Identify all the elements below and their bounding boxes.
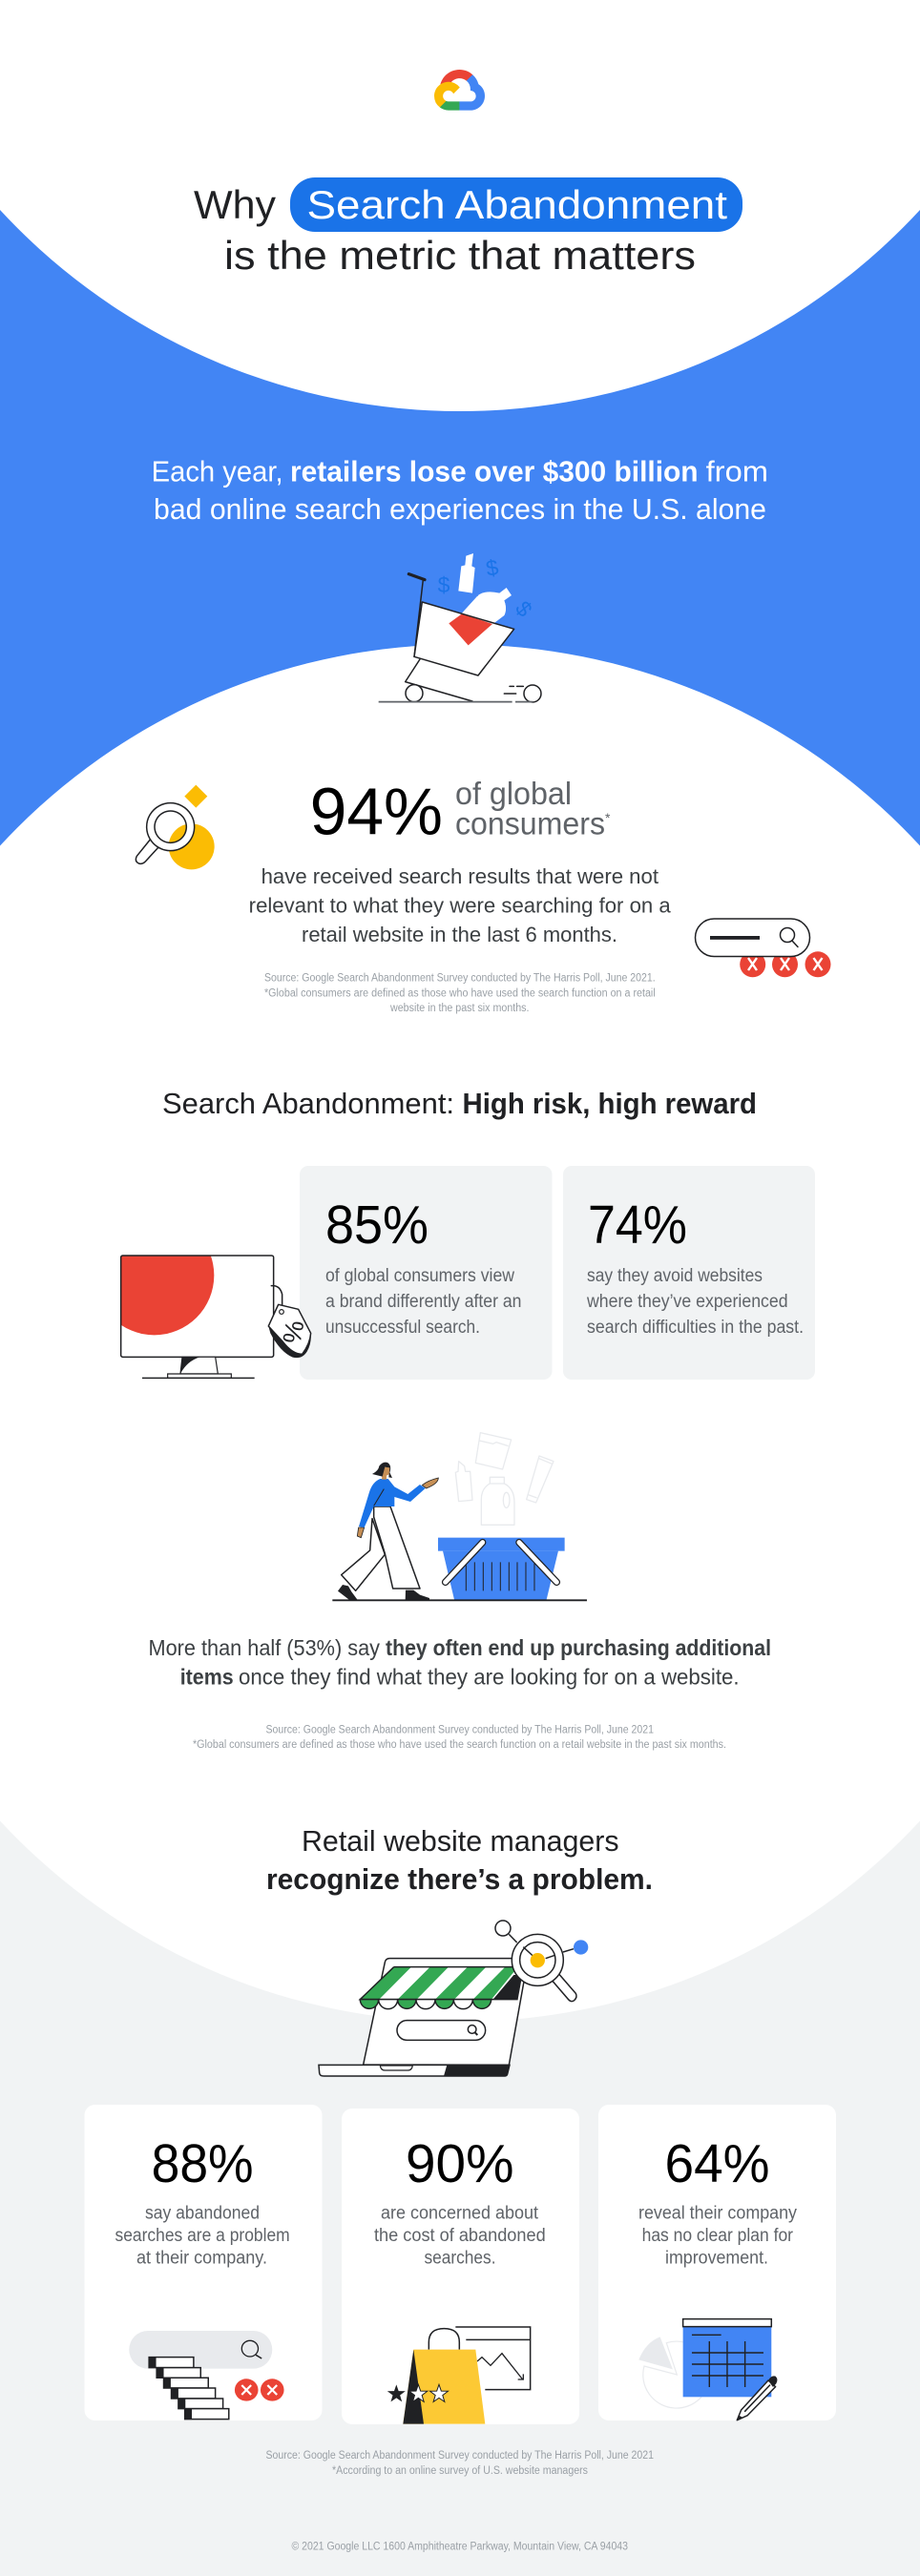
source note: purchases	[193, 1725, 726, 1751]
title	[194, 177, 742, 278]
icon: magnifier with yellow shapes	[136, 785, 215, 869]
text block: 53% purchase more: once they find what they are looking for on a website.	[239, 1665, 740, 1690]
74% number: 74%	[588, 1195, 687, 1256]
64% number: 64%	[664, 2133, 769, 2194]
source note: consumers: *Global consumers are defined as those who have used the search function on a retail	[264, 987, 656, 999]
heading: high risk, high reward: Search Abandonment:	[162, 1087, 454, 1120]
64% description: reveal their company	[638, 2204, 797, 2224]
heading: high risk, high reward	[162, 1087, 757, 1120]
price tag percent sign: %	[277, 1319, 309, 1345]
source note: purchases: *Global consumers are defined as those who have used the search function on a retail website in the past six months.	[193, 1739, 726, 1751]
74% description	[586, 1266, 804, 1338]
cart frame	[406, 580, 472, 701]
source note: consumers	[264, 973, 656, 1014]
text block: 53% purchase more: items	[180, 1665, 234, 1690]
dollar signs: $	[511, 596, 537, 621]
stat: 94% of global consumers: of global	[455, 776, 572, 811]
icon: shopping bag with chart and stars	[387, 2327, 531, 2424]
90% description: searches.	[424, 2249, 496, 2269]
85% number: 85%	[325, 1195, 429, 1256]
source note: consumers: website in the past six months.	[389, 1003, 529, 1014]
cart wheels	[406, 685, 423, 702]
64% description: improvement.	[665, 2249, 768, 2269]
footer copyright: © 2021 Google LLC 1600 Amphitheatre Parkway, Mountain View, CA 94043	[292, 2542, 628, 2553]
icon: shopping cart with tumbling items	[379, 553, 541, 702]
90% description	[374, 2204, 546, 2269]
88% description: say abandoned	[145, 2204, 260, 2224]
stat: 94% of global consumers: consumers	[455, 805, 605, 841]
90% number: 90%	[406, 2133, 513, 2194]
price tag	[271, 1286, 282, 1310]
title: Why	[194, 182, 276, 227]
awning	[360, 1967, 522, 2009]
illustration: shopper and basket	[332, 1433, 587, 1600]
source note: purchases: Source: Google Search Abandonment Survey conducted by The Harris Poll, June 2021	[265, 1725, 654, 1736]
88% description: searches are a problem	[115, 2226, 290, 2246]
source note: consumers: Source: Google Search Abandonment Survey conducted by The Harris Poll, June 2021.	[264, 973, 656, 985]
text block: search results not relevant	[249, 864, 671, 946]
90% description: the cost of abandoned	[374, 2226, 546, 2246]
title: is the metric that matters	[224, 233, 696, 278]
title: Search Abandonment	[307, 182, 727, 227]
90% description: are concerned about	[381, 2204, 539, 2224]
basket	[438, 1538, 565, 1600]
icon: monitor with price tag	[120, 1255, 311, 1380]
icon: search bar with failed results	[695, 919, 830, 977]
headline: $300 billion lost: Each year,	[152, 454, 283, 488]
85% description: unsuccessful search.	[325, 1318, 480, 1338]
ground and speed lines	[379, 701, 533, 703]
monitor stand	[180, 1357, 218, 1374]
icon: lipstick	[458, 553, 475, 593]
text block: search results not relevant: have received search results that were not	[261, 864, 659, 888]
64% description: has no clear plan for	[642, 2226, 794, 2246]
64% description	[638, 2204, 797, 2269]
icon: plan document with pie and pencil	[638, 2319, 777, 2420]
headline: $300 billion lost: from	[706, 454, 768, 488]
magnifier with network nodes	[495, 1921, 588, 2002]
88% description: at their company.	[136, 2249, 267, 2269]
shopper	[338, 1463, 438, 1600]
74% description: search difficulties in the past.	[587, 1318, 804, 1338]
dollar signs: $	[438, 572, 450, 597]
stat: 94% of global consumers	[310, 774, 611, 848]
88% number: 88%	[152, 2133, 254, 2194]
85% description: of global consumers view	[325, 1266, 514, 1286]
text block: search results not relevant: retail website in the last 6 months.	[302, 923, 617, 946]
cart basket	[414, 602, 514, 675]
source note: managers: Source: Google Search Abandonment Survey conducted by The Harris Poll, June 2021	[265, 2450, 654, 2462]
headline: $300 billion lost: retailers lose over $300 billion	[290, 454, 699, 488]
laptop screen	[364, 1959, 528, 2065]
dollar signs	[438, 554, 537, 621]
panel: 64% stat	[598, 2105, 836, 2420]
text block: 53% purchase more: More than half (53%) say	[149, 1635, 380, 1660]
icon: search bar with stairs	[129, 2331, 284, 2420]
dollar signs: $	[484, 554, 500, 581]
74% description: where they’ve experienced	[586, 1292, 788, 1312]
source note: managers: *According to an online survey of U.S. website managers	[332, 2465, 588, 2477]
monitor screen	[121, 1256, 274, 1357]
stat: 94% of global consumers: 94%	[310, 774, 443, 848]
laptop base	[319, 2065, 510, 2076]
stat: 94% of global consumers: *	[605, 810, 611, 825]
store search bar	[397, 2021, 486, 2040]
heading: retail website managers	[266, 1824, 653, 1896]
panel: 85% stat	[300, 1166, 552, 1380]
heading: retail website managers: Retail website managers	[302, 1824, 619, 1858]
panel: 74% stat	[563, 1166, 815, 1380]
85% description	[325, 1266, 521, 1338]
heading: high risk, high reward: High risk, high reward	[462, 1087, 757, 1120]
text block: 53% purchase more: they often end up purchasing additional	[386, 1635, 771, 1660]
panel: 90% stat	[342, 2109, 579, 2424]
headline: $300 billion lost	[152, 454, 768, 526]
text block: 53% purchase more	[149, 1635, 771, 1690]
source note: managers	[265, 2450, 654, 2477]
icon: bottle	[461, 588, 512, 624]
headline: $300 billion lost: bad online search experiences in the U.S. alone	[154, 492, 766, 526]
panel: 88% stat	[84, 2105, 323, 2420]
74% description: say they avoid websites	[587, 1266, 763, 1286]
88% description	[115, 2204, 290, 2269]
text block: search results not relevant: relevant to what they were searching for on a	[249, 894, 671, 918]
ghost product items	[455, 1433, 554, 1525]
illustration: storefront laptop with magnifier	[319, 1921, 588, 2076]
85% description: a brand differently after an	[325, 1292, 521, 1312]
heading: retail website managers: recognize there’s a problem.	[266, 1862, 653, 1896]
icon: Google Cloud logo	[434, 70, 485, 111]
